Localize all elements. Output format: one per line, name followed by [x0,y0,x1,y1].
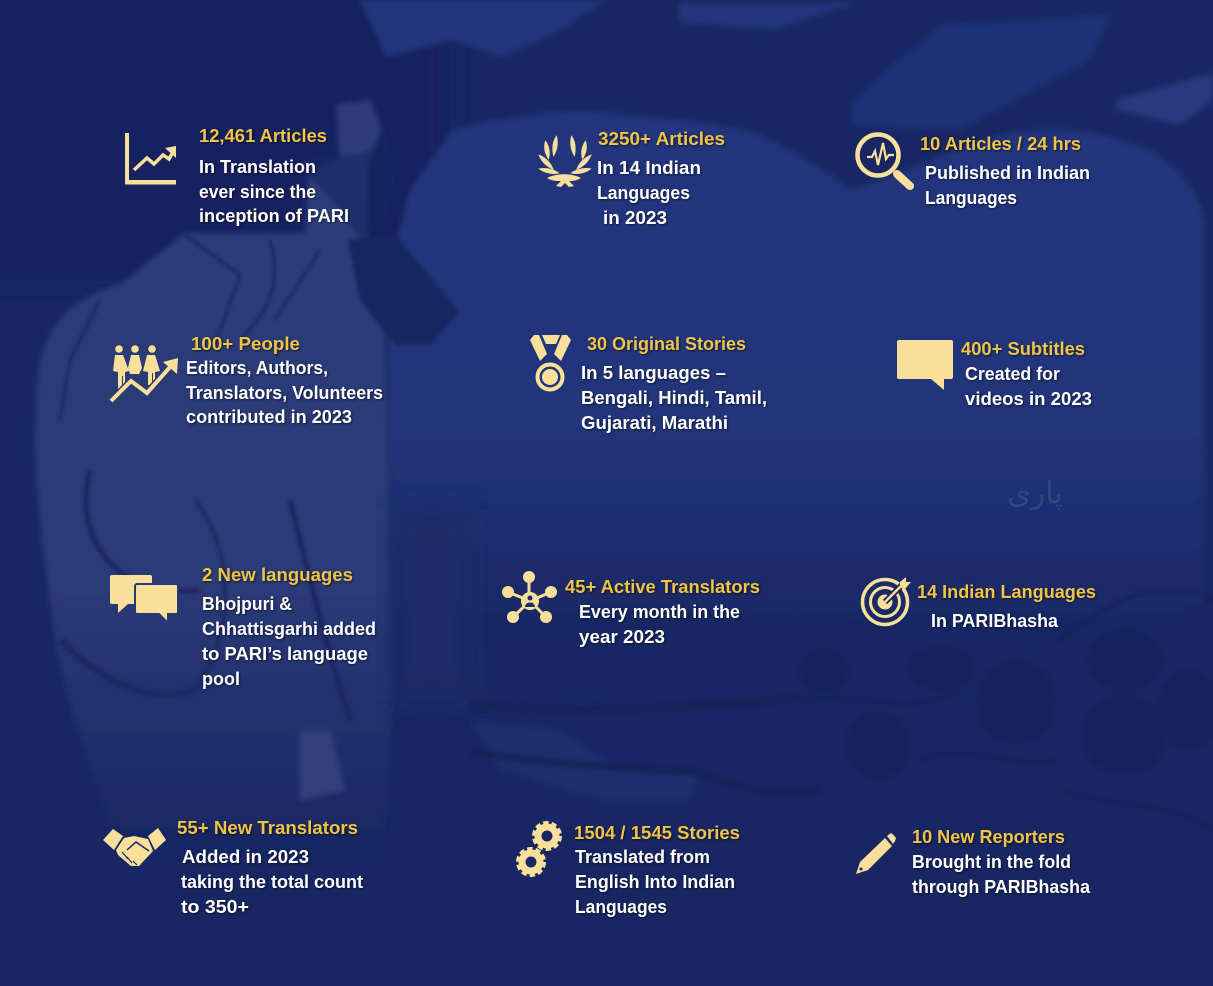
body text: Created for [965,364,1060,384]
body text: Languages [575,897,667,917]
body text: contributed in 2023 [186,407,352,427]
body text [202,594,376,689]
body text: In 5 languages – [581,363,726,383]
panel: 100+ People [111,334,383,427]
body text [925,163,1090,208]
body text: in 2023 [603,208,667,228]
body text: videos in 2023 [965,389,1092,409]
panel: 10 Articles / 24 hrs [858,134,1090,208]
heading: 55+ New Translators [177,818,358,838]
body text: inception of PARI [199,206,349,226]
icon: two speech bubbles [110,575,178,623]
body text: Bengali, Hindi, Tamil, [581,388,767,408]
icon: magnifier with pulse [858,134,910,186]
icon: pencil [856,833,896,874]
body text: ever since the [199,182,316,202]
heading: 100+ People [191,334,300,354]
body text [181,847,363,917]
icon: network of people [502,571,557,623]
heading: 2 New languages [202,565,353,585]
body text: to 350+ [181,897,249,917]
icon: handshake [103,828,166,866]
body text: to PARI’s language [202,644,368,664]
panel: 30 Original Stories [530,334,767,433]
icon: medal [530,335,571,390]
body text [186,358,383,427]
body text: Every month in the [579,602,740,622]
body text: through PARIBhasha [912,877,1091,897]
heading: 14 Indian Languages [917,582,1096,602]
icon: gears [518,822,560,876]
heading: 45+ Active Translators [565,577,760,597]
body text [965,364,1092,409]
body text: English Into Indian [575,872,735,892]
body text: In Translation [199,157,316,177]
panel: 1504 / 1545 Stories [518,822,740,917]
body text: In 14 Indian [597,158,701,178]
panel: 12,461 Articles [125,126,349,226]
panel: 2 New languages [110,565,376,689]
panel: 400+ Subtitles [897,339,1092,409]
icon: line chart [125,133,176,184]
heading: 12,461 Articles [199,126,327,146]
body text [581,363,767,433]
icon: people with rising arrow [111,345,178,401]
body text: pool [202,669,240,689]
heading: 3250+ Articles [598,129,725,149]
background: painted watercolour scene: پاری [1007,477,1063,511]
icon: target with arrow [862,577,911,624]
background: river lines and crowd [470,590,1213,830]
body text: Languages [925,188,1017,208]
body text [575,847,735,917]
icon: speech bubble [897,340,953,390]
body text [597,158,701,228]
panel: 10 New Reporters [856,827,1091,897]
body text: Gujarati, Marathi [581,413,728,433]
heading: 10 New Reporters [912,827,1065,847]
body text: taking the total count [181,872,363,892]
panel: 45+ Active Translators [502,571,760,647]
body text: Translators, Volunteers [186,383,383,403]
background: painted figure [35,100,700,850]
body text: Editors, Authors, [186,358,328,378]
heading: 400+ Subtitles [961,339,1085,359]
panel: 55+ New Translators [103,818,363,917]
heading: 1504 / 1545 Stories [574,823,740,843]
body text: Published in Indian [925,163,1090,183]
icon: laurel wreath [536,135,594,187]
body text: Chhattisgarhi added [202,619,376,639]
heading: 30 Original Stories [587,334,746,354]
panel: 3250+ Articles [536,129,725,228]
body text [912,852,1091,897]
body text [579,602,740,647]
body text: Added in 2023 [182,847,309,867]
heading: 10 Articles / 24 hrs [920,134,1081,154]
body text: Languages [597,183,690,203]
body text: Bhojpuri & [202,594,292,614]
body text: Brought in the fold [912,852,1071,872]
body text: In PARIBhasha [931,611,1059,631]
body text [199,157,349,226]
body text: year 2023 [579,627,665,647]
panel: 14 Indian Languages [862,577,1096,631]
body text: Translated from [575,847,710,867]
